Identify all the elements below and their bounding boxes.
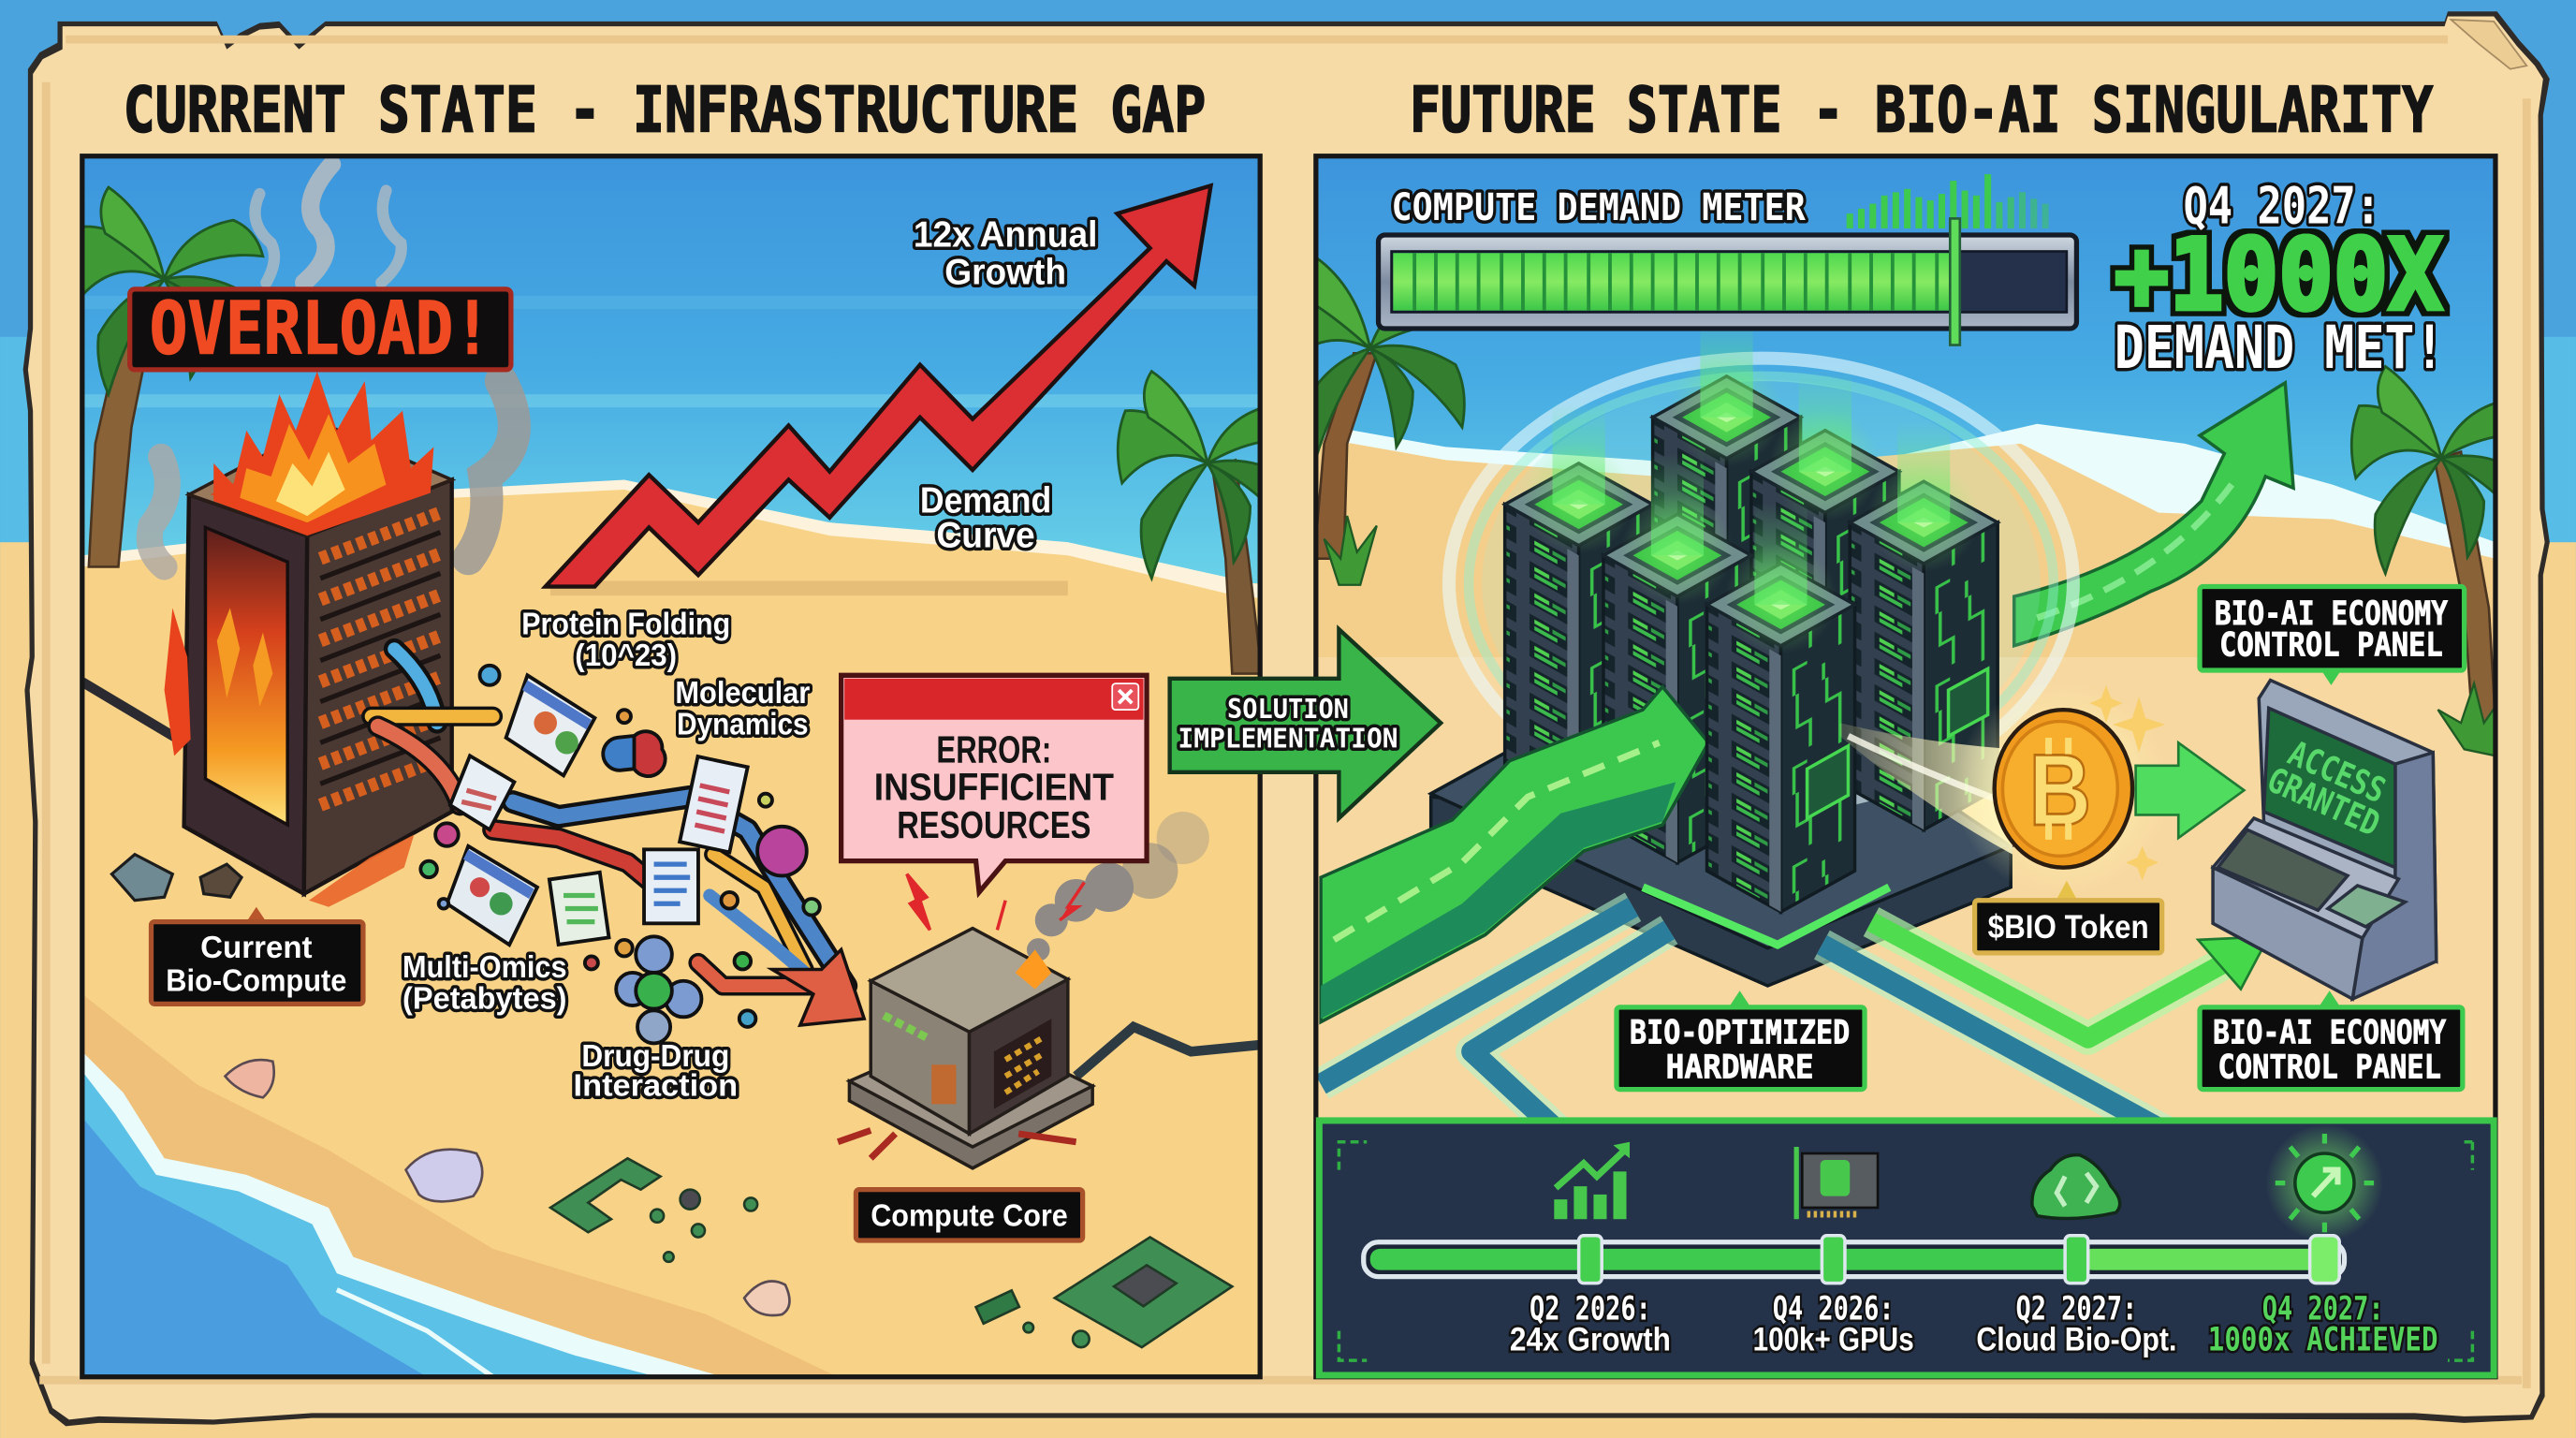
sparkles [2089,685,2165,881]
label: demand curve: Curve [936,515,1035,555]
label: bio-optimized hardware: BIO-OPTIMIZED [1630,1013,1850,1051]
right panel border [1316,156,2496,1377]
milestone: q4 2026: 100k+ GPUs [1753,1322,1914,1358]
scene background: sky and sea [82,156,1260,583]
label: multi-omics: (Petabytes) [402,982,567,1017]
energy swoosh to coin [1840,723,2012,855]
callout: q4 2027 result: Q4 2027: [2183,177,2380,236]
server tower right [1850,420,1998,829]
label: bio-ai economy control panel (upper): CONTROL PANEL [2219,625,2443,664]
label: current bio-compute: Current [200,931,313,965]
right palm tree [1118,372,1306,674]
server tower front [1707,503,1854,912]
ocean shore [82,994,838,1377]
icon: target achieved [2265,1123,2384,1242]
compute core smoke [1027,812,1209,961]
milestone: q2 2026 [1510,1289,1671,1358]
label: compute core: Compute Core [871,1198,1068,1233]
icon: cloud [2032,1155,2120,1219]
label: drug-drug interaction: Drug-Drug [581,1039,729,1074]
server tower mid right [1751,370,1899,779]
power cable [82,682,184,742]
label: $BIO token [1975,881,2162,953]
milestone: q2 2027: Q2 2027: [2015,1289,2137,1328]
error popup: ERROR: [936,727,1051,770]
compute core machine [838,874,1258,1168]
label: 12x annual growth: 12x Annual [914,214,1097,255]
smoke plumes [150,165,514,566]
label: drug-drug interaction [574,1039,738,1104]
icon: growth chart [1554,1142,1630,1219]
floating data documents [420,666,820,1043]
access granted screen text: ACCESS [2282,733,2392,811]
solution implementation arrow [1170,629,1441,818]
label: $BIO token: $BIO Token [1988,909,2149,946]
label: molecular dynamics: Dynamics [677,707,809,741]
left inflow ribbon [1321,687,1708,1022]
error popup: INSUFFICIENT [874,766,1114,809]
data streams into the compute core [372,649,846,994]
label: drug-drug interaction: Interaction [574,1069,738,1104]
label: compute core [856,1190,1083,1240]
arrow from coin to terminal [2136,742,2244,838]
label: bio-optimized hardware: HARDWARE [1666,1048,1814,1086]
label: 12x annual growth: Growth [944,253,1066,293]
callout: q4 2027 result: +1000X [2115,217,2443,332]
milestone: q4 2026: Q4 2026: [1773,1289,1895,1328]
meter marker [1950,218,1960,345]
loose microchip [976,1238,1232,1347]
label: bio-ai economy control panel (upper): BIO-AI ECONOMY [2215,594,2448,633]
panel: roadmap timeline [1319,1121,2494,1375]
compute base platform [1431,640,2011,986]
access granted screen text: GRANTED [2261,759,2386,844]
milestone: q4 2026 [1753,1289,1914,1358]
compute demand meter [1379,174,2076,345]
milestone: q2 2027: Cloud Bio-Opt. [1976,1322,2176,1358]
burning server tower [184,424,452,907]
milestone: q4 2027 [2208,1289,2438,1359]
error popup: RESOURCES [897,803,1090,846]
milestone nodes [1579,1236,2339,1284]
shield bubble [1449,359,2073,808]
label: 12x annual growth [914,214,1097,293]
solution implementation arrow: SOLUTION [1227,694,1349,725]
label: current bio-compute [152,907,363,1004]
solution implementation arrow: IMPLEMENTATION [1178,724,1398,755]
data pipes [1321,907,2243,1134]
stream arrow head [772,949,864,1025]
label: bio-ai economy control panel (lower): CONTROL PANEL [2217,1048,2441,1086]
icon: gpu card [1794,1147,1878,1219]
green pipe arrow head [2198,936,2269,990]
label: multi-omics: Multi-Omics [402,950,567,985]
meter spectrum bars [1847,174,2049,228]
label: molecular dynamics [675,676,810,741]
access granted screen text [2261,729,2399,844]
panel: future state scene [1318,158,2494,1118]
milestone: q2 2026: Q2 2026: [1530,1289,1651,1328]
server tower mid [1603,453,1751,862]
label: protein folding: (10^23) [575,638,677,673]
server tower left [1505,403,1653,812]
label: protein folding: Protein Folding [521,607,730,641]
label: bio-ai economy control panel (lower) [2200,990,2463,1090]
left panel border [82,156,1260,1377]
label: demand curve [920,481,1051,555]
label: multi-omics [402,950,567,1017]
sea shells [225,1060,789,1315]
$BIO token coin [1955,681,2172,897]
label: protein folding [521,607,730,673]
label: current bio-compute: Bio-Compute [166,963,346,998]
flames [165,372,433,756]
panel: current state scene [84,158,1258,1374]
left palm tree [1281,257,1469,559]
label: bio-ai economy control panel (upper) [2200,587,2465,685]
label: molecular dynamics: Molecular [675,676,810,711]
milestone: q4 2027: 1000x ACHIEVED [2208,1321,2438,1359]
label: bio-optimized hardware [1617,990,1865,1090]
milestone: q4 2027: Q4 2027: [2262,1289,2384,1328]
right palm tree [2351,366,2539,723]
green growth ribbon arrow [2014,383,2293,646]
rocks by the server [111,855,242,901]
circuit chips on tower faces [1808,668,1988,818]
label: demand curve: Demand [920,481,1051,521]
callout: q4 2027 result: DEMAND MET! [2115,313,2445,382]
left palm tree [75,187,263,566]
label: bio-ai economy control panel (lower): BIO-AI ECONOMY [2213,1013,2446,1051]
broken circuit board [550,1158,757,1262]
demand curve arrow [546,185,1211,587]
meter fill [1393,253,1952,311]
milestone: q2 2027 [1976,1289,2176,1358]
beach sand [1316,424,2496,1134]
beach sand [82,479,1260,1377]
overload sign: OVERLOAD! [150,286,491,371]
meter track [1379,235,2076,329]
control terminal [2213,681,2437,999]
platform glow trace [1643,888,1889,945]
progress track [1364,1236,2344,1284]
beach plants [1325,516,2496,756]
milestone: q2 2026: 24x Growth [1510,1322,1671,1358]
title: current state: CURRENT STATE - INFRASTRUCTURE GAP [124,73,1206,146]
callout: q4 2027 result [2115,177,2445,382]
scene background: sky and sea [1316,156,2496,600]
meter label: COMPUTE DEMAND METER [1392,185,1806,229]
server tower back [1653,315,1801,725]
$BIO token coin: B [2029,733,2091,847]
error popup [842,675,1147,892]
